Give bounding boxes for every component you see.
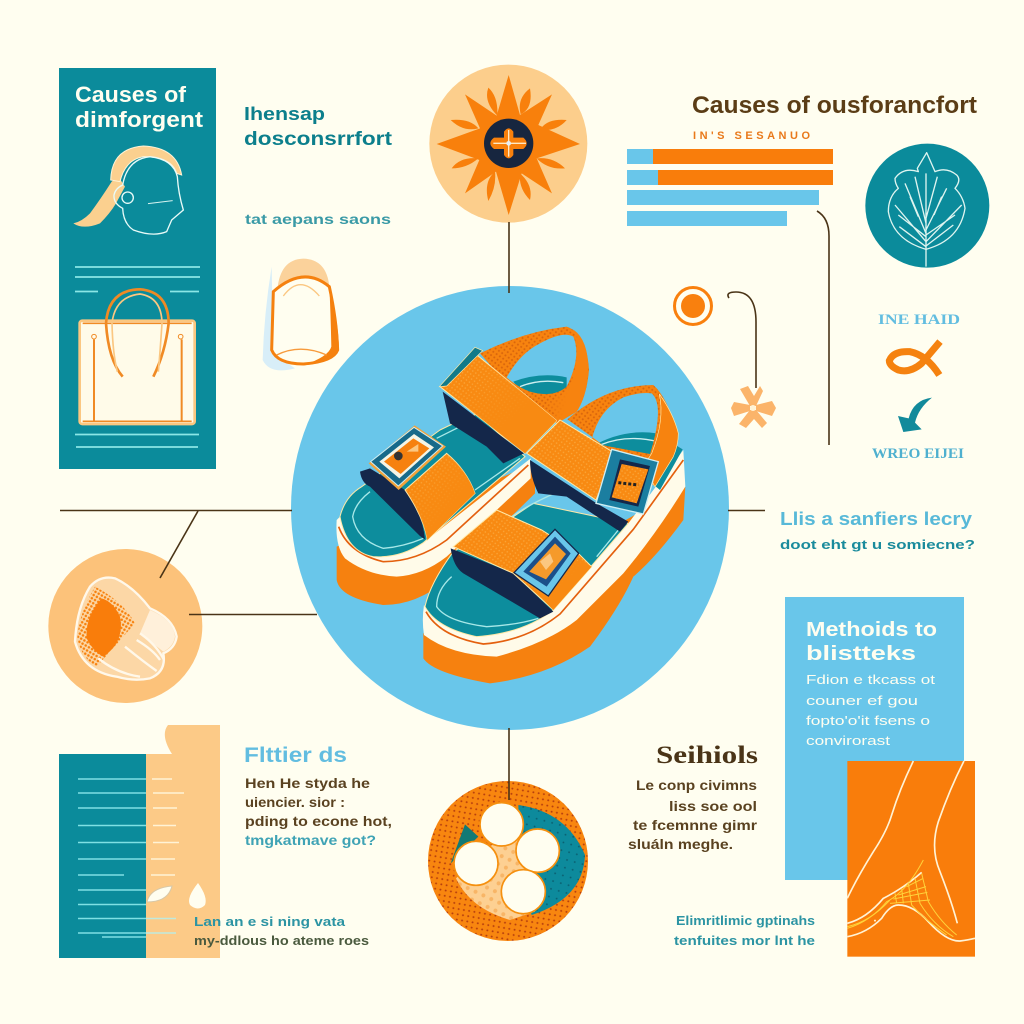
panel heading [75, 82, 204, 132]
panel heading [806, 619, 937, 665]
icon: bag [80, 289, 195, 424]
chart: striped panel bottom left [59, 725, 220, 958]
rear heel strap [480, 327, 589, 423]
front heel strap [567, 385, 678, 487]
text block: bottom right caption: Elimritlimic gptinahs [676, 913, 815, 928]
panel: orange foot [847, 761, 975, 957]
text block: bottom right caption [674, 913, 815, 948]
text block: seihiols: Seihiols [656, 742, 758, 769]
heading: top right [692, 92, 977, 142]
panel text: Fdion e tkcass ot [806, 672, 935, 687]
icon: leaf badge [865, 144, 989, 268]
heading: top right: IN'S SESANUO [693, 130, 810, 142]
icon: target [674, 288, 712, 324]
panel heading: dimforgent [75, 107, 204, 132]
front rear buckle [596, 449, 658, 514]
text lines [75, 267, 200, 447]
text block: top left: dosconsrrfort [244, 129, 393, 150]
panel text: couner ef gou [806, 693, 918, 708]
text block: top left: tat aepans saons [245, 211, 391, 227]
row lines [78, 779, 184, 937]
sandal illustration [336, 327, 685, 683]
icon: toe circle [428, 781, 588, 941]
icon: droplet and leaf [189, 883, 206, 908]
icon: orange ribbon [889, 342, 940, 375]
panel: causes of discomfort [59, 68, 216, 469]
text block: top left: Ihensap [244, 104, 325, 124]
icon: sun badge [429, 65, 587, 223]
text block: bottom left caption: Lan an e si ning vata [194, 914, 346, 929]
panel heading: Causes of [75, 82, 187, 107]
text block: right middle: Llis a sanfiers lecry [780, 509, 972, 529]
rear buckle [369, 425, 446, 490]
panel text: fopto'o'it fsens o [806, 713, 930, 728]
text block: seihiols [628, 742, 758, 852]
connector lines [60, 211, 829, 800]
text block: right middle: doot eht gt u somiecne? [780, 537, 975, 552]
text block: flitter: uiencier. sior : [245, 794, 345, 810]
text block: seihiols: Le conp civimns [636, 777, 757, 793]
rear sandal [336, 327, 589, 605]
front sandal [423, 385, 685, 683]
panel: methods to blisters [785, 597, 964, 880]
panel heading: blistteks [806, 643, 916, 665]
text block: bottom left caption: my-ddlous ho ateme roes [194, 933, 369, 948]
icon: blister on foot [48, 549, 202, 703]
text block: seihiols: te fcemnne gimr [633, 817, 758, 833]
icon: head with ponytail [73, 146, 183, 234]
text block: bottom right caption: tenfuites mor lnt he [674, 933, 815, 948]
panel heading: Methoids to [806, 619, 937, 641]
icon: teal arrow [898, 398, 932, 432]
text block: right middle [780, 509, 975, 552]
sun rays [437, 75, 580, 215]
bar chart [627, 149, 833, 226]
panel text [806, 672, 935, 748]
text block: flitter: Flttier ds [244, 744, 347, 767]
text block: top left [244, 104, 393, 227]
toes [454, 803, 559, 914]
label: wreo eijei: WREO EIJEI [872, 446, 964, 462]
heading: top right: Causes of ousforancfort [692, 92, 977, 119]
icon: toenail [263, 259, 339, 370]
text block: bottom left caption [194, 914, 369, 948]
label: ine haid: INE HAID [878, 312, 960, 328]
icon: asterisk flower [731, 386, 776, 428]
text block: seihiols: liss soe ool [669, 798, 757, 814]
panel text: convirorast [806, 733, 891, 748]
text block: flitter: pding to econe hot, [245, 813, 392, 829]
blister mesh [847, 860, 957, 937]
text block: flitter [244, 744, 392, 848]
central circle [291, 286, 729, 730]
text block: flitter: tmgkatmave got? [245, 832, 376, 848]
front toe buckle [514, 529, 579, 596]
text block: flitter: Hen He styda he [245, 775, 370, 791]
text block: seihiols: sluáln meghe. [628, 836, 733, 852]
